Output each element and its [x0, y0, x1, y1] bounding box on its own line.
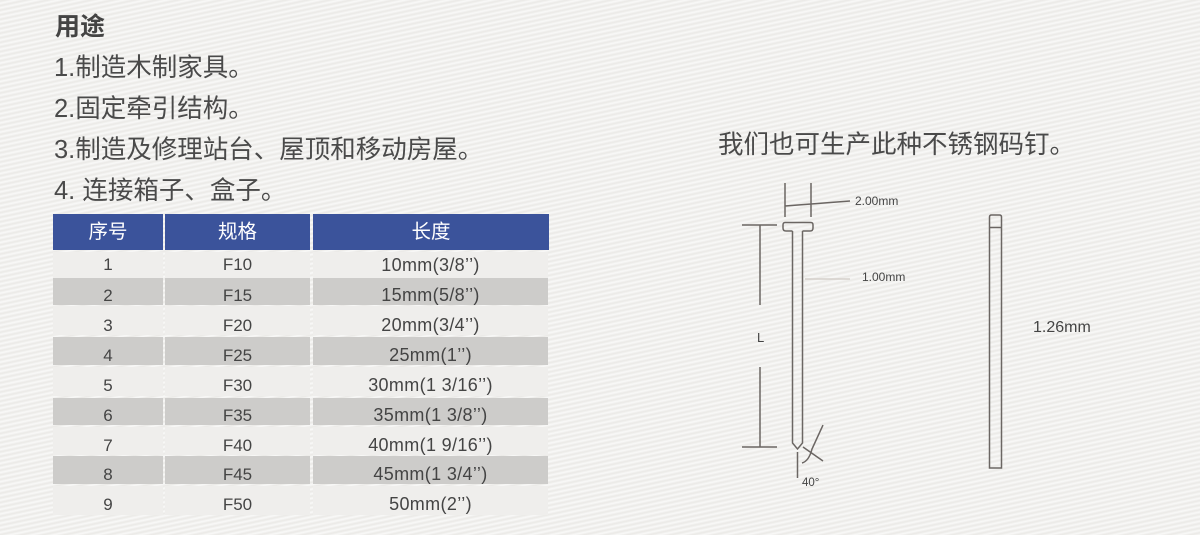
row 6: 35mm(1 3/8’’): [373, 405, 488, 425]
row 1: 10mm(3/8’’): [381, 255, 480, 275]
row 4: 4: [103, 346, 113, 365]
row 5: 30mm(1 3/16’’): [368, 375, 493, 395]
tip angle 40 degrees: 40°: [802, 477, 819, 489]
row 2: 15mm(5/8’’): [381, 285, 480, 305]
row 1: 1: [103, 255, 113, 274]
usage item 4: 4. 连接箱子、盒子。: [54, 176, 286, 204]
row 4: F25: [223, 346, 252, 365]
head width dimension: [785, 183, 898, 217]
head width dimension: 2.00mm: [855, 194, 898, 208]
row 3: [53, 306, 548, 335]
row 6: [53, 398, 548, 425]
row 9: F50: [223, 495, 252, 514]
length dimension L: L: [757, 330, 764, 345]
row 2: F15: [223, 286, 252, 305]
row 1: F10: [223, 255, 252, 274]
shank diameter label: [805, 270, 905, 284]
row 7: 40mm(1 9/16’’): [368, 435, 493, 455]
row 3: F20: [223, 316, 252, 335]
row 9: 9: [103, 495, 113, 514]
heading: usage: 用途: [55, 13, 105, 41]
row 2: 2: [103, 286, 113, 305]
icon: side view of nail with width label: 1.26mm: [1033, 319, 1091, 336]
icon: side view of nail with width label: [990, 215, 1091, 468]
row 8: 8: [103, 465, 113, 484]
table header: 规格: [218, 221, 257, 243]
tip angle 40 degrees: [798, 425, 823, 489]
row 8: F45: [223, 465, 252, 484]
row 3: 3: [103, 316, 113, 335]
table header: 序号: [88, 221, 128, 243]
row 9: [53, 486, 548, 515]
usage item 2: 2.固定牵引结构。: [54, 94, 254, 122]
row 9: 50mm(2’’): [389, 494, 472, 514]
nail outline: [783, 222, 813, 449]
row 1: [53, 252, 548, 278]
row 8: [53, 456, 548, 484]
stainless steel note: 我们也可生产此种不锈钢码钉。: [718, 130, 1075, 158]
row 5: F30: [223, 376, 252, 395]
icon: T-head nail with dimensions: [742, 183, 905, 489]
row 3: 20mm(3/4’’): [381, 315, 480, 335]
usage item 1: 1.制造木制家具。: [54, 54, 254, 82]
row 7: [53, 427, 548, 455]
table header: [53, 214, 549, 250]
row 4: 25mm(1’’): [389, 345, 472, 365]
row 5: 5: [103, 376, 113, 395]
table header: 长度: [411, 221, 450, 243]
row 6: 6: [103, 406, 113, 425]
row 7: F40: [223, 436, 252, 455]
row 4: [53, 337, 548, 365]
row 2: [53, 278, 548, 305]
length dimension L: [742, 225, 777, 447]
row 6: F35: [223, 406, 252, 425]
usage item 3: 3.制造及修理站台、屋顶和移动房屋。: [54, 136, 483, 164]
row 7: 7: [103, 436, 113, 455]
table: nail specifications: [53, 214, 549, 515]
row 5: [53, 367, 548, 396]
text block: usage list: [54, 54, 483, 204]
shank diameter label: 1.00mm: [862, 270, 905, 284]
row 8: 45mm(1 3/4’’): [373, 464, 488, 484]
